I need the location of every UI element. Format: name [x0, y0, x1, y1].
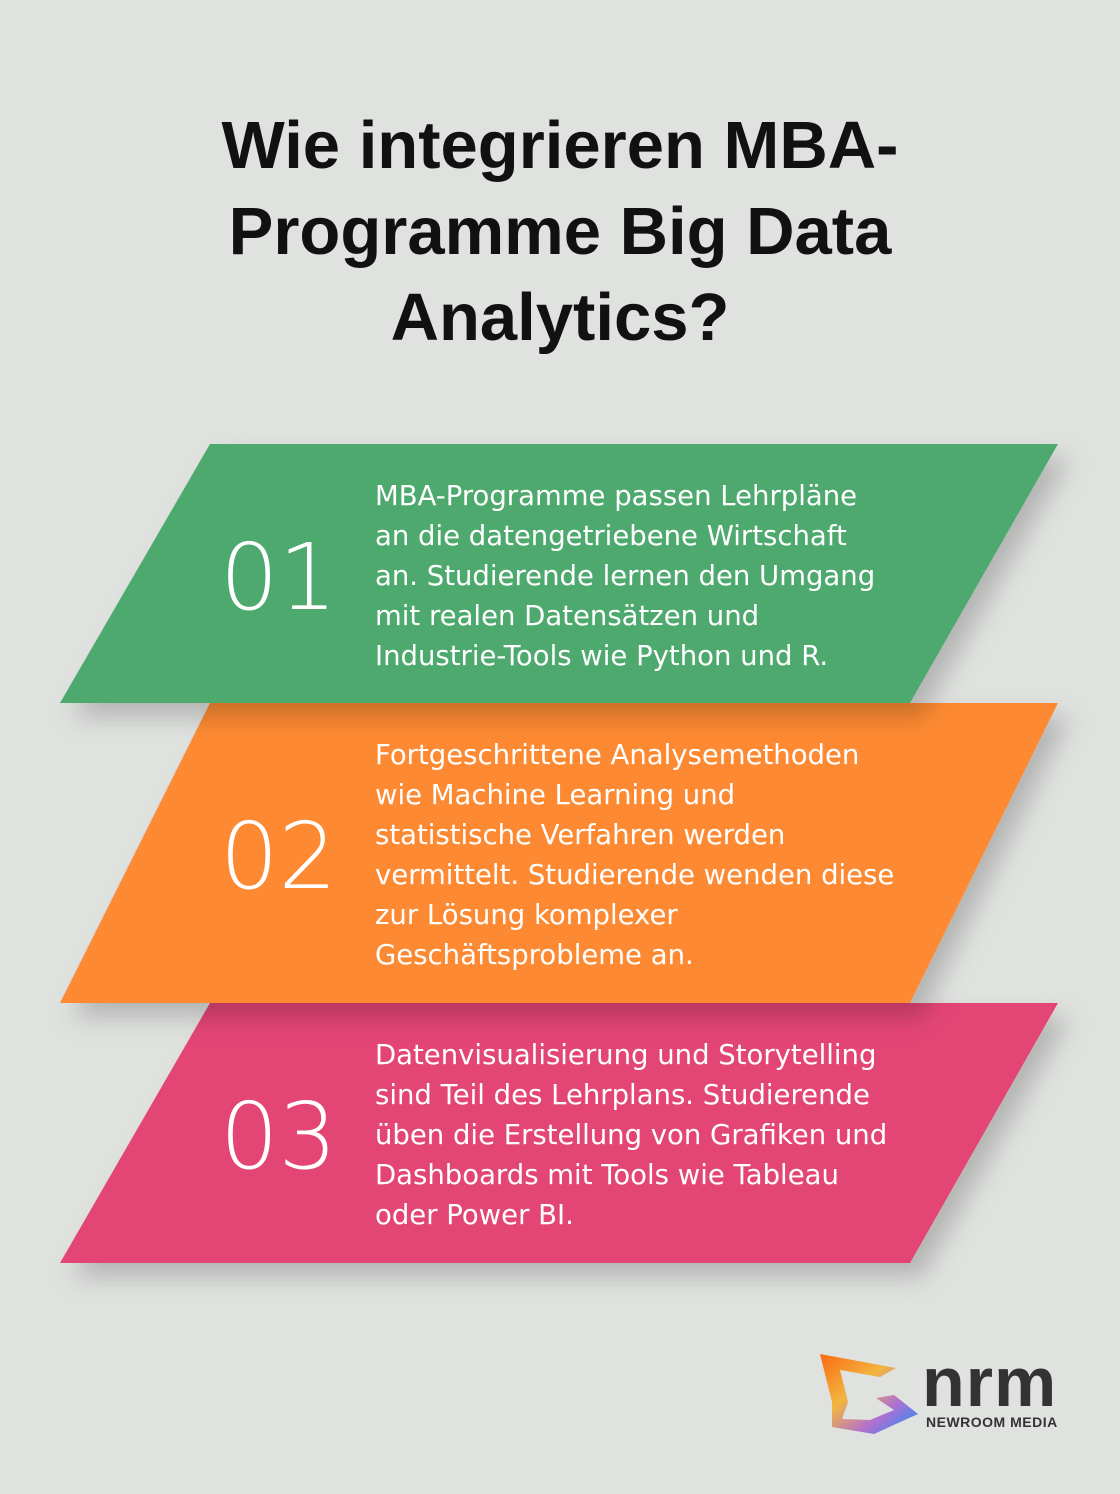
text 1: mit realen Datensätzen und	[375, 600, 759, 632]
text 2	[375, 739, 894, 971]
text 2: Fortgeschrittene Analysemethoden	[375, 739, 859, 771]
logo: NEWROOM MEDIA	[926, 1414, 1058, 1430]
text 3: üben die Erstellung von Grafiken und	[375, 1119, 887, 1151]
text 1: Industrie-Tools wie Python und R.	[375, 640, 828, 672]
text 3	[375, 1039, 887, 1231]
text 2: vermittelt. Studierende wenden diese	[375, 859, 894, 891]
number 03: 03	[220, 1083, 337, 1190]
title	[222, 108, 898, 355]
text 2: Geschäftsprobleme an.	[375, 939, 694, 971]
title: Programme Big Data	[229, 194, 891, 269]
text 1	[375, 480, 875, 672]
title: Analytics?	[391, 280, 729, 355]
text 2: statistische Verfahren werden	[375, 819, 785, 851]
panel 2	[220, 739, 894, 971]
title: Wie integrieren MBA-	[222, 108, 898, 183]
text 2: zur Lösung komplexer	[375, 899, 678, 931]
text 1: an. Studierende lernen den Umgang	[375, 560, 875, 592]
text 3: oder Power BI.	[375, 1199, 574, 1231]
number 01: 01	[220, 524, 337, 631]
text 2: wie Machine Learning und	[375, 779, 735, 811]
text 3: Datenvisualisierung und Storytelling	[375, 1039, 876, 1071]
icon: logo mark	[820, 1354, 918, 1434]
text 3: Dashboards mit Tools wie Tableau	[375, 1159, 839, 1191]
text 1: MBA-Programme passen Lehrpläne	[375, 480, 857, 512]
logo text: nrm	[922, 1343, 1057, 1421]
text 1: an die datengetriebene Wirtschaft	[375, 520, 847, 552]
number 02: 02	[220, 803, 337, 910]
text 3: sind Teil des Lehrplans. Studierende	[375, 1079, 870, 1111]
logo	[820, 1343, 1058, 1434]
panel 3	[220, 1039, 887, 1231]
panel 1	[220, 480, 875, 672]
